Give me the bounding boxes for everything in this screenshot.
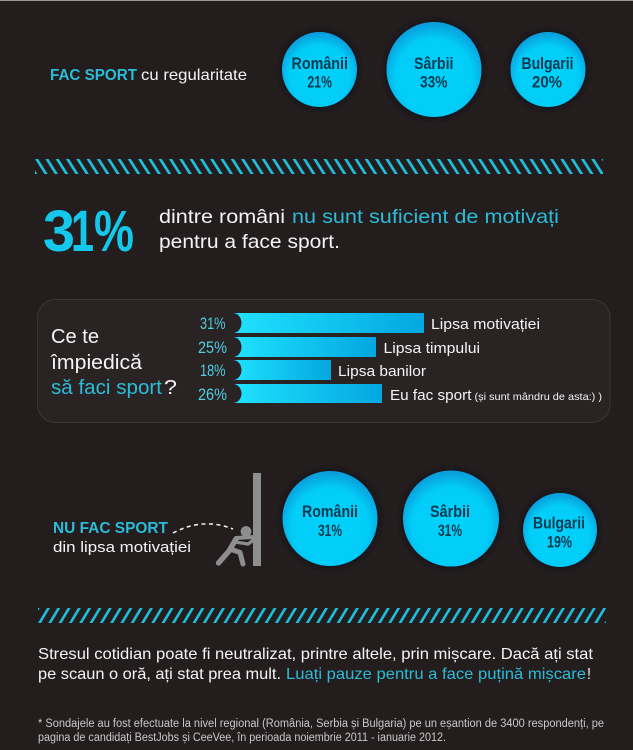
heading: fac sport [50,67,247,84]
closing message [38,646,594,683]
statement text: nu sunt suficient de motivați [292,206,559,228]
panel question: Ce te [51,325,99,348]
bar: Lipsa motivației 31% [200,313,540,333]
heading: fac sport: cu regularitate [141,67,247,84]
panel question: ? [164,376,177,399]
bar: Lipsa motivației 31%: Lipsa motivației [431,316,540,333]
panel question: împiedică [50,351,143,374]
panel: ce te împiedică [38,300,610,422]
big stat: 31%: % [94,199,134,264]
bar: Eu fac sport 26%: 26% [198,385,227,404]
bar: Lipsa banilor 18% [200,360,426,380]
bubble: Românii 31%: 31% [318,522,342,540]
closing message: pe scaun o oră, ați stat prea mult. [38,666,281,683]
heading: nu fac sport [53,520,191,556]
bubble: Bulgarii 20% [508,30,588,110]
big stat: 31% [43,199,134,264]
heading: nu fac sport: NU FAC SPORT [53,520,168,537]
bubble: Bulgarii 20%: Bulgarii [522,55,574,73]
dashed arrow line [173,524,233,533]
bubble: Românii 31% [280,468,380,568]
bubble: Sârbii 33%: 33% [420,74,448,92]
bubble: Sârbii 33% [384,20,484,120]
statement text: dintre români [159,206,285,228]
bar: Lipsa timpului 25%: Lipsa timpului [384,340,480,357]
bar: Lipsa banilor 18%: 18% [200,361,226,380]
bubble: Românii 21% [280,30,360,110]
big stat: 31%: 3 [43,199,75,264]
closing message: ! [587,666,591,683]
bubble: Sârbii 31%: Sârbii [430,503,470,521]
closing message: Luați pauze pentru a face puțină mișcare [286,666,586,683]
bubble: Bulgarii 19%: Bulgarii [533,514,585,532]
bubble: Sârbii 31%: 31% [438,522,462,540]
statement text: pentru a face sport. [159,231,340,253]
footnote: pagina de candidați BestJobs și CeeVee, în perioada noiembrie 2011 - ianuarie 2012. [38,732,446,744]
panel question: să faci sport [51,376,162,399]
panel question [50,325,177,399]
heading: fac sport: FAC SPORT [50,67,137,84]
bar: Lipsa timpului 25%: 25% [198,338,227,357]
big stat: 31%: 1 [71,199,94,264]
bar: Lipsa motivației 31%: 31% [200,314,226,333]
bar: Eu fac sport 26% [198,384,602,404]
bubble: Românii 31%: Românii [302,503,358,521]
bar: Eu fac sport 26%: (și sunt mândru de asta:) ) [474,391,602,403]
heading: nu fac sport: din lipsa motivației [53,539,191,556]
bubble: Românii 21%: 21% [308,74,332,92]
bubble: Bulgarii 20%: 20% [532,74,562,92]
footnote: * Sondajele au fost efectuate la nivel regional (România, Serbia și Bulgaria) pe un eșantion de 3400 respondenți, pe [38,718,604,730]
bubble: Bulgarii 19% [520,490,600,570]
footnote [38,718,604,744]
bubble: Sârbii 33%: Sârbii [414,55,454,73]
bar: Lipsa banilor 18%: Lipsa banilor [338,363,426,380]
closing message: Stresul cotidian poate fi neutralizat, printre altele, prin mișcare. Dacă ați stat [38,646,594,663]
bubble: Românii 21%: Românii [292,55,348,73]
bubble: Sârbii 31% [400,468,502,569]
bar: Lipsa timpului 25% [198,337,480,357]
icon: person pushing wall [218,473,261,566]
bubble: Bulgarii 19%: 19% [547,534,572,552]
bar: Eu fac sport 26%: Eu fac sport [390,387,472,404]
statement text [159,206,559,253]
